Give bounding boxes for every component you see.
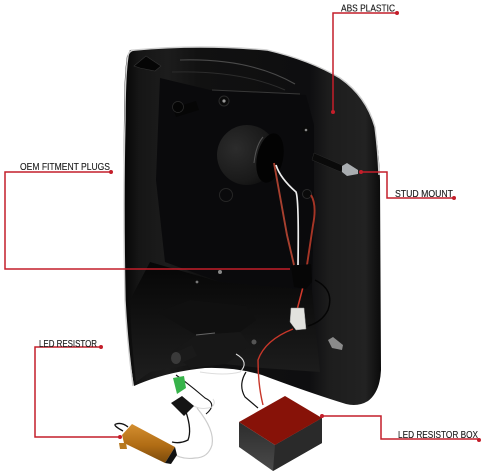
- callout: ABS plastic: ABS PLASTIC: [341, 4, 395, 14]
- lower cavity: [130, 262, 320, 382]
- fitment plug: [291, 264, 312, 289]
- gold resistor: [122, 424, 175, 463]
- wiring harness: [200, 163, 330, 408]
- callout: OEM fitment plugs: [5, 162, 290, 269]
- resistor wires: [115, 375, 214, 458]
- box sides: [239, 418, 322, 471]
- callout: LED resistor box: [320, 414, 481, 442]
- panel: LED resistor assembly: [115, 375, 214, 464]
- bulb socket: [210, 118, 288, 192]
- bulb holder cylinder: [171, 345, 197, 364]
- callout: ABS plastic: [331, 4, 399, 114]
- lamp body: [124, 47, 381, 405]
- top highlight: [180, 60, 295, 84]
- black module: [171, 396, 194, 416]
- callout: OEM fitment plugs: OEM FITMENT PLUGS: [20, 162, 110, 173]
- callout: LED resistor: LED RESISTOR: [39, 339, 97, 350]
- white connector: [290, 308, 306, 330]
- callout: LED resistor: [35, 339, 122, 439]
- panel: tail lamp housing: [124, 47, 381, 408]
- green connector: [173, 376, 186, 394]
- cavity shelf: [158, 300, 256, 335]
- callout: stud mount: STUD MOUNT: [395, 189, 453, 200]
- chrome rim top: [124, 47, 379, 386]
- stud mount: [312, 153, 358, 176]
- clips and bolts: [134, 56, 312, 344]
- callout: stud mount: [359, 170, 456, 200]
- box red top: [239, 396, 322, 445]
- panel: LED resistor box: [239, 396, 322, 471]
- lower stud: [328, 337, 343, 350]
- upper inner panel: [156, 78, 314, 290]
